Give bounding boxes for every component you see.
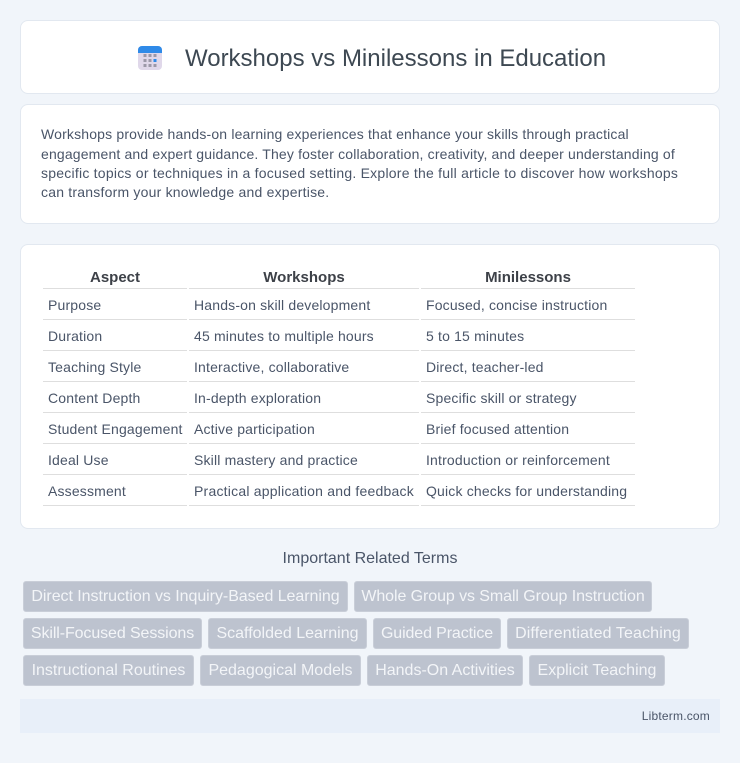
row: Teaching Style: Interactive, collaborative bbox=[194, 359, 349, 375]
icon: calendar bbox=[138, 46, 162, 70]
row: Ideal Use: Skill mastery and practice bbox=[194, 452, 358, 468]
row: Duration: 45 minutes to multiple hours bbox=[194, 328, 374, 344]
row: Assessment: Practical application and feedback bbox=[194, 483, 414, 499]
table header: Aspect bbox=[90, 269, 140, 286]
row: Assessment: Assessment bbox=[48, 483, 126, 499]
tag: Pedagogical Models bbox=[208, 662, 353, 679]
related terms tags bbox=[23, 581, 689, 686]
intro text bbox=[41, 126, 678, 200]
row: Student Engagement: Student Engagement bbox=[48, 421, 183, 437]
tag: Guided Practice bbox=[381, 625, 493, 642]
tag bbox=[23, 618, 202, 649]
intro text: engagement and expert guidance. They foster collaboration, creativity, and deeper understanding of bbox=[41, 146, 675, 162]
row: Content Depth bbox=[43, 390, 635, 413]
tag bbox=[507, 618, 689, 649]
intro text: specific topics or techniques in a focused setting. Explore the full article to discover how workshops bbox=[41, 165, 678, 181]
row: Duration bbox=[43, 328, 635, 351]
tag bbox=[354, 581, 652, 612]
footer credit: Libterm.com bbox=[642, 709, 710, 723]
tag bbox=[23, 581, 348, 612]
footer bbox=[20, 699, 720, 733]
row: Assessment bbox=[43, 483, 635, 506]
tag: Skill-Focused Sessions bbox=[31, 625, 194, 642]
table header: Minilessons bbox=[485, 269, 571, 286]
tag bbox=[23, 655, 194, 686]
intro card bbox=[20, 104, 720, 224]
row: Student Engagement: Active participation bbox=[194, 421, 315, 437]
row: Purpose: Purpose bbox=[48, 297, 101, 313]
row: Content Depth: In-depth exploration bbox=[194, 390, 321, 406]
tag: Whole Group vs Small Group Instruction bbox=[361, 588, 645, 605]
row: Teaching Style: Teaching Style bbox=[48, 359, 141, 375]
intro text: Workshops provide hands-on learning experiences that enhance your skills through practical bbox=[41, 126, 629, 142]
table header: Workshops bbox=[263, 269, 345, 286]
row: Content Depth: Specific skill or strategy bbox=[426, 390, 577, 406]
title card bbox=[20, 20, 720, 94]
row: Student Engagement: Brief focused attention bbox=[426, 421, 569, 437]
comparison table card bbox=[20, 244, 720, 529]
tag: Explicit Teaching bbox=[538, 662, 656, 679]
row: Ideal Use: Ideal Use bbox=[48, 452, 109, 468]
row: Ideal Use bbox=[43, 452, 635, 475]
comparison table bbox=[43, 269, 635, 506]
tag bbox=[200, 655, 361, 686]
row: Purpose bbox=[43, 297, 635, 320]
tag: Hands-On Activities bbox=[375, 662, 515, 679]
row: Duration: Duration bbox=[48, 328, 102, 344]
row: Duration: 5 to 15 minutes bbox=[426, 328, 524, 344]
tag: Instructional Routines bbox=[32, 662, 185, 679]
tag bbox=[208, 618, 367, 649]
row: Purpose: Focused, concise instruction bbox=[426, 297, 607, 313]
row: Ideal Use: Introduction or reinforcement bbox=[426, 452, 610, 468]
intro text: can transform your knowledge and expertise. bbox=[41, 184, 329, 200]
row: Assessment: Quick checks for understanding bbox=[426, 483, 627, 499]
row: Purpose: Hands-on skill development bbox=[194, 297, 370, 313]
tag bbox=[529, 655, 665, 686]
title: Workshops vs Minilessons in Education bbox=[185, 45, 606, 72]
tag bbox=[367, 655, 523, 686]
row: Student Engagement bbox=[43, 421, 635, 444]
table header bbox=[90, 269, 571, 286]
tag: Scaffolded Learning bbox=[216, 625, 359, 642]
row: Content Depth: Content Depth bbox=[48, 390, 140, 406]
tag: Differentiated Teaching bbox=[515, 625, 681, 642]
row: Teaching Style: Direct, teacher-led bbox=[426, 359, 544, 375]
tag bbox=[373, 618, 501, 649]
related terms heading: Important Related Terms bbox=[283, 550, 457, 567]
row: Teaching Style bbox=[43, 359, 635, 382]
tag: Direct Instruction vs Inquiry-Based Learning bbox=[31, 588, 340, 605]
